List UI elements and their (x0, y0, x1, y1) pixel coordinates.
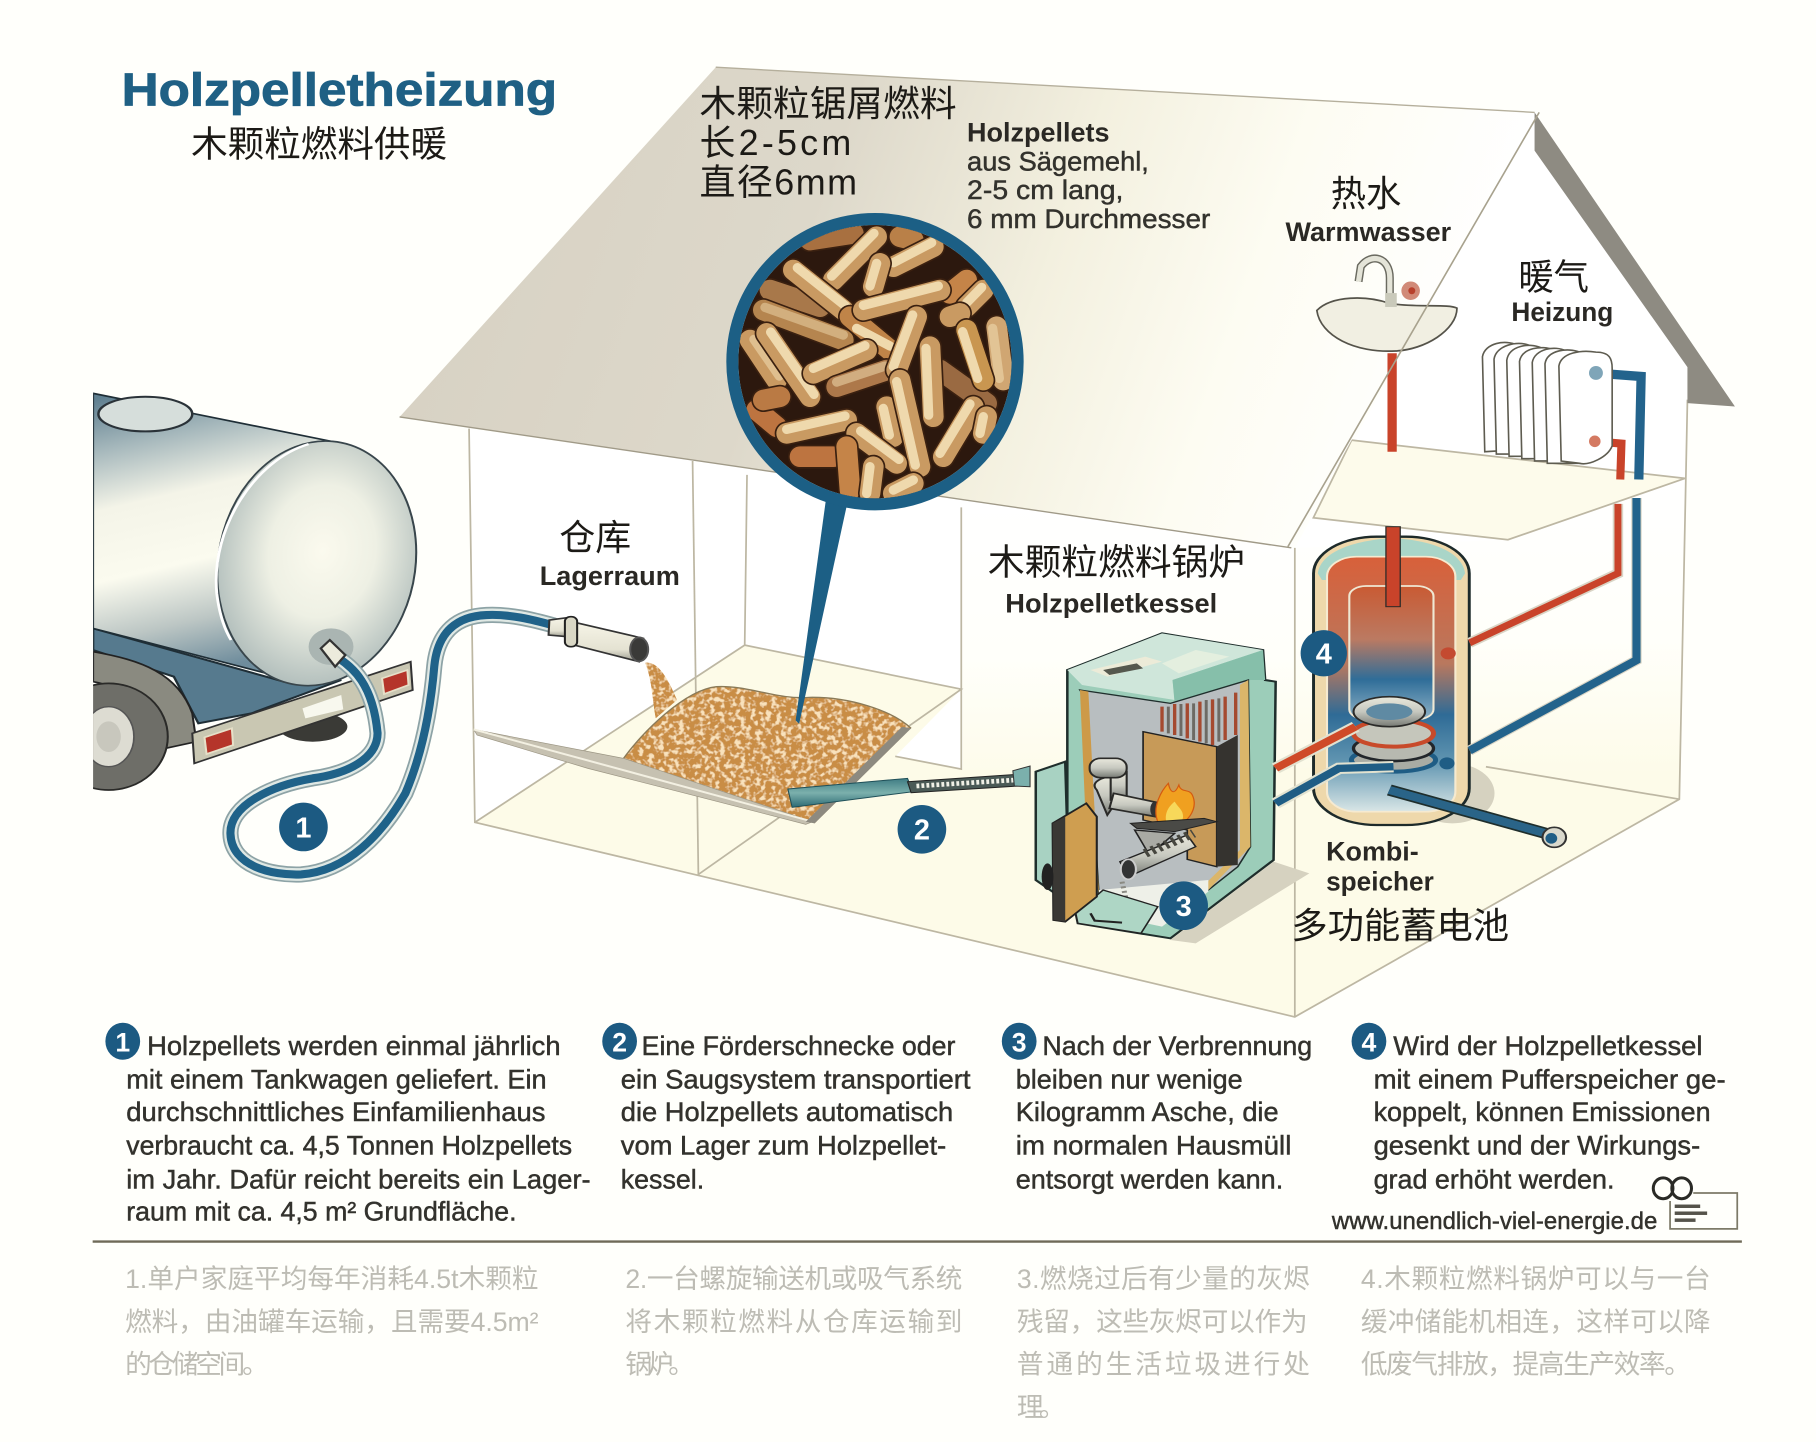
logo (1653, 1178, 1737, 1229)
text block: step 4 german: koppelt, können Emissionen (1374, 1097, 1711, 1127)
lens ring (732, 219, 1018, 504)
text block: step 4 german: mit einem Pufferspeicher ge- (1374, 1065, 1726, 1095)
label: storage room: Lagerraum (540, 561, 680, 591)
feed pipe (1090, 758, 1158, 817)
label: pellet boiler: Holzpelletkessel (1005, 589, 1217, 619)
title: Holzpelletheizung (122, 63, 557, 115)
tray (474, 729, 813, 824)
text block: step 2 german (602, 1023, 971, 1194)
badge 3 (1159, 881, 1208, 930)
hot water riser (1386, 527, 1400, 607)
magnifier pointer (796, 492, 849, 724)
store water (1327, 557, 1455, 812)
label: pellets german: aus Sägemehl, (967, 146, 1149, 176)
text block: step 4 chinese (1361, 1264, 1711, 1380)
text block: step 4 german: grad erhöht werden. (1374, 1164, 1614, 1194)
text block: step 3 chinese (1017, 1264, 1310, 1422)
text block: step 2 german: die Holzpellets automatisch (621, 1097, 953, 1127)
text block: step 2 german: Eine Förderschnecke oder (642, 1031, 956, 1061)
tank body (93, 393, 341, 680)
badge 3: 3 (1176, 891, 1192, 923)
text block: step 3 chinese: 残留，这些灰烬可以作为 (1017, 1307, 1308, 1337)
text block: step 1 chinese: 1.单户家庭平均每年消耗4.5t木颗粒 (125, 1264, 539, 1294)
text block: step 4 chinese: 低废气排放，提高生产效率。 (1361, 1350, 1691, 1380)
label: pellets german: 2-5 cm lang, (967, 175, 1123, 205)
text block: step 3 german (1002, 1023, 1312, 1194)
label: combination storage: speicher (1326, 867, 1434, 897)
roof side strip (1535, 112, 1735, 407)
label: heating: 暖气 (1518, 258, 1589, 298)
firebox wall (1143, 732, 1217, 867)
pile (624, 687, 911, 823)
roof edge line (1288, 112, 1539, 547)
burner grate (1130, 818, 1217, 832)
red coil link (1276, 727, 1356, 768)
rear wheel behind (283, 716, 348, 742)
text block: step 4 german: 4 (1362, 1028, 1377, 1058)
badge 1 (279, 803, 328, 851)
text block: step 1 german: Holzpellets werden einmal jährlich (147, 1031, 561, 1061)
text block: step 4 german: Wird der Holzpelletkessel (1393, 1031, 1702, 1061)
text block: step 1 chinese: 的仓储空间。 (125, 1350, 269, 1380)
conveyor pipe (788, 778, 913, 807)
ash (1099, 880, 1208, 927)
tank shadow (1410, 763, 1495, 823)
text block: step 4 chinese: 缓冲储能机相连，这样可以降 (1361, 1307, 1711, 1337)
magnified pellets (720, 213, 1030, 513)
label: heating: Heizung (1511, 297, 1613, 327)
label: combination storage: 多功能蓄电池 (1291, 906, 1509, 946)
back wall and floor fill (469, 112, 1687, 1016)
casing (1067, 633, 1276, 938)
heat exchanger rods (1162, 693, 1236, 745)
text block: step 1 german (105, 1023, 591, 1227)
falling pellets (645, 663, 677, 718)
text block: step 2 german: kessel. (621, 1164, 704, 1194)
text block: step 2 chinese: 2.一台螺旋输送机或吸气系统 (625, 1264, 962, 1294)
text block: step 3 chinese: 3.燃烧过后有少量的灰烬 (1017, 1264, 1310, 1294)
label: combination storage (1291, 837, 1509, 946)
drain blue pipe (1389, 790, 1558, 837)
radiator (1482, 342, 1612, 464)
label: warm water: 热水 (1331, 174, 1401, 214)
label: heating (1511, 258, 1613, 327)
text block: step 3 german: im normalen Hausmüll (1016, 1131, 1291, 1161)
panel: house (400, 67, 1735, 1017)
label: pellets german: 6 mm Durchmesser (967, 204, 1210, 234)
text block: step 1 chinese: 燃料，由油罐车运输，且需要4.5m² (125, 1307, 539, 1337)
hose socket (309, 628, 353, 665)
coil (1351, 697, 1436, 772)
flames (1156, 783, 1194, 826)
badge 1: 1 (295, 812, 311, 844)
text block: step 1 german: raum mit ca. 4,5 m² Grundfläche. (126, 1197, 517, 1227)
wheel (93, 682, 169, 791)
hose connector and nozzle (321, 617, 648, 667)
text block: step 2 german: 2 (612, 1028, 627, 1058)
outer shell (1314, 537, 1469, 825)
sink (1317, 258, 1457, 351)
text block: step 3 german: bleiben nur wenige (1016, 1065, 1243, 1095)
combination storage tank (1276, 527, 1566, 847)
label: pellet boiler (988, 542, 1245, 619)
label: pellets german: Holzpellets (967, 117, 1110, 147)
door (1053, 803, 1097, 922)
text block: step 1 german: mit einem Tankwagen geliefert. Ein (126, 1065, 547, 1095)
text block: step 4 german: gesenkt und der Wirkungs- (1374, 1131, 1700, 1161)
tank lid (98, 397, 192, 431)
hose (230, 615, 554, 875)
wheel arch (93, 652, 196, 750)
text block: step 3 chinese: 普通的生活垃圾进行处 (1017, 1350, 1310, 1380)
ash drawer (1076, 890, 1158, 933)
tank pipe fittings (1441, 647, 1456, 659)
badge 2 (898, 805, 946, 854)
tank truck (93, 392, 418, 791)
text block: step 2 chinese (625, 1264, 962, 1380)
inner vessel (1349, 586, 1433, 719)
text block: step 1 german: im Jahr. Dafür reicht bereits ein Lager- (126, 1164, 591, 1194)
text block: step 3 german: 3 (1012, 1028, 1027, 1058)
badge 2: 2 (914, 815, 930, 847)
website url: www.unendlich-viel-energie.de (1331, 1208, 1657, 1235)
label: pellet boiler: 木颗粒燃料锅炉 (988, 542, 1245, 582)
label: storage room: 仓库 (559, 518, 631, 558)
pellet pile and tray (474, 663, 1030, 824)
text block: step 1 chinese (125, 1264, 539, 1380)
label: pellets chinese: 木颗粒锯屑燃料 (700, 84, 957, 124)
label: warm water (1286, 174, 1451, 247)
label: pellets chinese: 长2-5cm (700, 123, 851, 163)
label: warm water: Warmwasser (1286, 217, 1451, 247)
text block: step 2 german: ein Saugsystem transportiert (621, 1065, 971, 1095)
text block: step 1 german: durchschnittliches Einfamilienhaus (126, 1097, 545, 1127)
title (122, 63, 557, 164)
blue coil link (1276, 767, 1394, 803)
text block: step 2 german: vom Lager zum Holzpellet- (621, 1131, 946, 1161)
text block: step 2 chinese: 锅炉。 (625, 1350, 695, 1380)
badge 4 (1301, 630, 1347, 676)
boiler shadow (1170, 862, 1309, 943)
label: storage room (540, 518, 680, 591)
label: pellets german (967, 117, 1210, 234)
text block: step 3 chinese: 理。 (1017, 1392, 1066, 1422)
wall lines (469, 400, 1687, 1017)
text block: step 2 chinese: 将木颗粒燃料从仓库运输到 (625, 1307, 962, 1337)
text block: step 3 german: Nach der Verbrennung (1042, 1031, 1312, 1061)
text block: step 1 german: 1 (115, 1028, 130, 1058)
chassis body (93, 628, 341, 723)
label: combination storage: Kombi- (1326, 837, 1419, 867)
badge 4: 4 (1316, 639, 1332, 671)
title: 木颗粒燃料供暖 (191, 124, 447, 164)
radiator connectors (1589, 366, 1603, 447)
auger (1120, 835, 1196, 877)
interior (1080, 680, 1250, 893)
conveyor screw (908, 774, 1018, 793)
text block: step 3 german: Kilogramm Asche, die (1016, 1097, 1279, 1127)
boiler (1036, 633, 1309, 943)
tank end cap (218, 440, 418, 686)
label: pellets chinese (700, 84, 957, 203)
text block: step 4 chinese: 4.木颗粒燃料锅炉可以与一台 (1361, 1264, 1711, 1294)
text block: step 4 german (1352, 1023, 1726, 1194)
text block: step 3 german: entsorgt werden kann. (1016, 1164, 1283, 1194)
upper floor plate (1313, 440, 1685, 540)
text block: step 1 german: verbraucht ca. 4,5 Tonnen Holzpellets (126, 1131, 572, 1161)
left flange (1036, 762, 1069, 903)
bumper bar (192, 662, 413, 763)
right side pipes (1392, 353, 1641, 751)
label: pellets chinese: 直径6mm (700, 163, 857, 203)
roof panel (400, 67, 1535, 548)
